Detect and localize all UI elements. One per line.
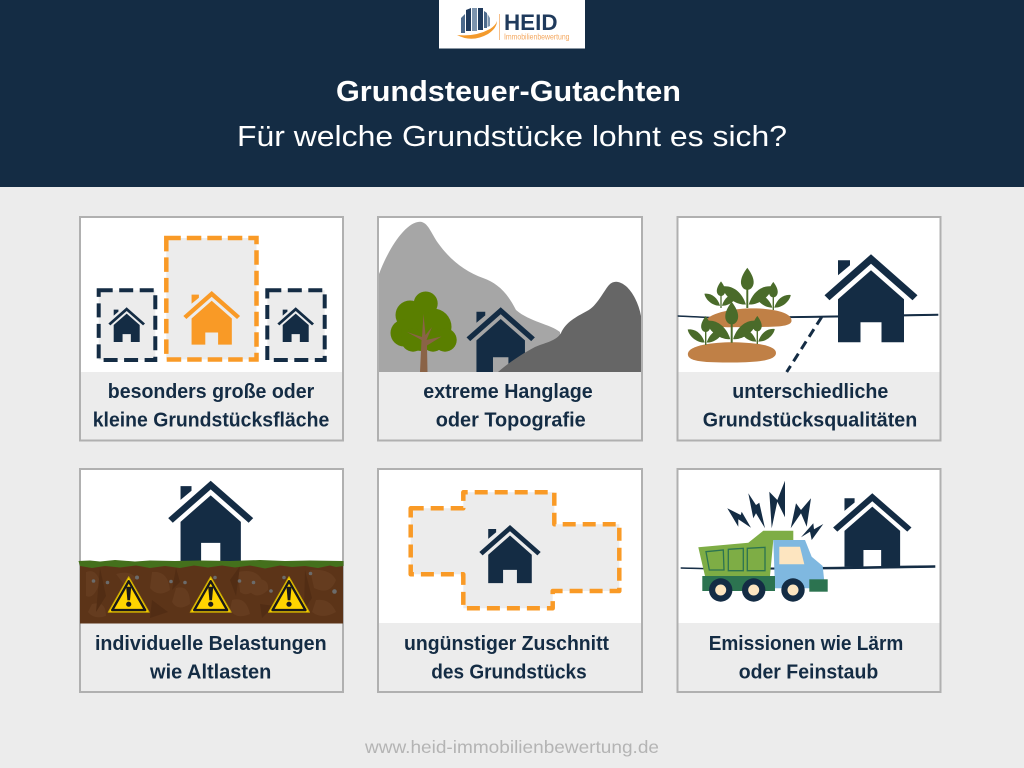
icon: tree [390, 292, 457, 372]
label [709, 633, 903, 684]
panel: Emissionen [678, 469, 940, 692]
ground line [678, 314, 938, 318]
icon: grass [78, 560, 344, 568]
icon: light mountain [379, 222, 560, 372]
icon: dark mountain [498, 282, 641, 372]
label: wie Altlasten [149, 662, 271, 684]
icon: large orange plot with house [166, 238, 256, 360]
label [404, 633, 609, 684]
title: Grundsteuer-Gutachten [336, 76, 681, 108]
label [93, 381, 329, 432]
panel: Grundstücksfläche [80, 217, 343, 440]
icon: front soil [688, 342, 776, 362]
label: des Grundstücks [431, 662, 587, 684]
icon: house [467, 307, 535, 372]
label: individuelle Belastungen [95, 633, 327, 655]
icon: boundary dashed line [787, 317, 822, 372]
icon: noise bolts [727, 481, 823, 540]
logo: Immobilienbewertung [504, 32, 570, 42]
icon: soil [80, 563, 343, 624]
label: besonders große oder [108, 381, 314, 403]
label: oder Topografie [436, 410, 586, 432]
icon: house [833, 493, 911, 567]
ground line [681, 566, 935, 570]
icon: right small plot with house [267, 290, 325, 360]
panel: Grundstücksqualitäten [678, 217, 940, 440]
panel: Zuschnitt [378, 469, 642, 692]
label: unterschiedliche [732, 381, 888, 403]
icon: house [168, 481, 253, 561]
label: Emissionen wie Lärm [709, 633, 903, 655]
icon: logo building [457, 8, 497, 39]
subtitle: Für welche Grundstücke lohnt es sich? [237, 121, 787, 153]
icon: warning sign 3 [268, 577, 310, 612]
label: extreme Hanglage [423, 381, 593, 403]
panel: Hanglage [378, 217, 642, 440]
logo: HEID [504, 10, 558, 35]
icon: house [824, 254, 918, 342]
icon: warning sign 1 [108, 577, 149, 612]
icon: warning sign 2 [190, 577, 231, 612]
icon: left small plot with house [99, 290, 155, 360]
icon: front plants [688, 302, 775, 345]
label: Grundstücksqualitäten [703, 410, 917, 432]
label [95, 633, 327, 684]
label [423, 381, 593, 432]
label: ungünstiger Zuschnitt [404, 633, 609, 655]
header band [0, 0, 1024, 187]
icon: irregular dashed plot [411, 492, 619, 608]
icon: back soil [705, 308, 792, 327]
label [703, 381, 917, 432]
panel: Altlasten [78, 469, 344, 692]
label: oder Feinstaub [739, 662, 878, 684]
logo [439, 0, 585, 48]
icon: house [479, 525, 541, 583]
icon: back plants [704, 268, 791, 310]
footer url: www.heid-immobilienbewertung.de [364, 737, 659, 757]
label: kleine Grundstücksfläche [93, 410, 329, 432]
icon: dump truck [698, 531, 828, 602]
